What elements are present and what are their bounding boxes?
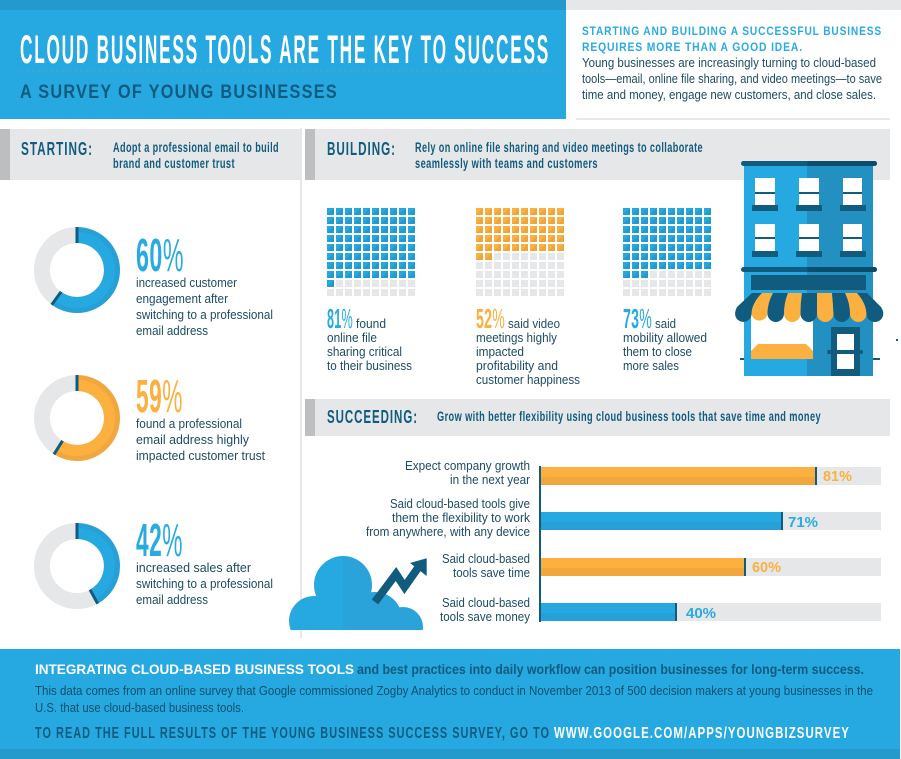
stat: 73% [623,303,707,373]
survey note: U.S. that use cloud-based business tools. [35,701,244,715]
waffle chart: 81% [327,208,415,296]
bar labels [366,459,531,624]
bar labels: Said cloud-based tools give [390,497,530,511]
panel: building header [305,129,890,180]
stat: 60%: increased customer [136,276,237,290]
bar chart: 40% [686,605,716,622]
stat: 81%: to their business [327,359,412,373]
stat: 73%: mobility allowed [623,331,707,345]
stat: 73%: more sales [623,359,679,373]
stat: 59%: impacted customer trust [136,449,265,463]
footer headline [35,661,864,677]
bar labels: from anywhere, with any device [366,525,530,539]
header banner [0,0,901,119]
stat: 73%: them to close [623,345,692,359]
survey note [35,684,873,715]
stat: 60%: switching to a professional [136,308,273,322]
panel: footer [0,649,900,759]
bar labels: Said cloud-based [442,596,530,610]
stat: 81%: found [356,317,386,331]
stat: 52%: 52% [476,303,505,334]
bar labels: Said cloud-based [442,552,530,566]
bar chart: 71% [788,514,818,531]
stat: 42%: increased sales after [136,561,251,575]
bar chart: 81% [823,468,852,485]
stat: 60%: email address [136,324,208,338]
stat: 81% [327,303,412,373]
donut chart: 59% [42,375,112,454]
stat: 52%: impacted [476,345,524,359]
subtitle: A SURVEY OF YOUNG BUSINESSES [20,82,338,103]
intro text block: time and money, engage new customers, and close sales. [582,88,876,102]
stat: 60%: engagement after [136,292,228,306]
panel: starting header: STARTING: [21,139,93,159]
waffle chart: 52% [476,208,564,296]
waffle chart: 73% [623,208,711,296]
stat: 73%: said [655,317,676,331]
bar labels: in the next year [450,473,530,487]
intro text block [576,24,890,120]
stat: 42%: 42% [136,514,183,566]
stat: 52% [476,303,580,387]
bar labels: Expect company growth [405,459,530,473]
stat: 52%: said video [508,317,560,331]
footer headline: INTEGRATING CLOUD-BASED BUSINESS TOOLS [35,661,354,677]
stat: 52%: customer happiness [476,373,580,387]
stat: 73%: 73% [623,303,652,334]
stat: 81%: 81% [327,303,353,334]
panel: succeeding header [305,399,890,436]
stat: 81%: sharing critical [327,345,402,359]
bar labels: tools save time [453,566,530,580]
bar labels: them the flexibility to work [392,511,531,525]
panel: succeeding header: SUCCEEDING: [327,407,418,427]
call to action: TO READ THE FULL RESULTS OF THE YOUNG BUSINESS SUCCESS SURVEY, GO TO [35,725,550,742]
stat: 59% [136,370,265,463]
stat: 60%: 60% [136,229,184,281]
stat: 52%: profitability and [476,359,558,373]
stat: 59%: email address highly [136,433,250,447]
icon: storefront building [735,161,883,376]
stat: 52%: meetings highly [476,331,558,345]
stat: 42% [136,514,273,607]
icon: cloud with rising arrow [289,556,427,630]
stat: 42%: email address [136,593,208,607]
panel: starting header [0,129,300,180]
panel: building header: seamlessly with teams and customers [415,156,598,171]
bar chart: 60% [752,559,781,576]
panel: building header: Rely on online file sharing and video meetings to collaborate [415,140,703,155]
stat: 59%: 59% [136,370,183,422]
intro text block: Young businesses are increasingly turning to cloud-based [582,56,876,70]
stat: 42%: switching to a professional [136,577,273,591]
donut chart: 42% [42,523,112,604]
bar labels: tools save money [440,610,531,624]
panel: starting header: Adopt a professional email to build [113,140,279,155]
intro text block: REQUIRES MORE THAN A GOOD IDEA. [582,40,803,54]
stat: 59%: found a professional [136,417,242,431]
stat: 81%: online file [327,331,377,345]
panel: starting header: brand and customer trust [113,156,235,171]
panel: building header: BUILDING: [327,139,396,159]
footer headline: and best practices into daily workflow can position businesses for long-term success. [357,662,864,677]
donut chart: 60% [42,227,112,305]
bar chart [539,466,881,622]
stat: 60% [136,229,273,338]
